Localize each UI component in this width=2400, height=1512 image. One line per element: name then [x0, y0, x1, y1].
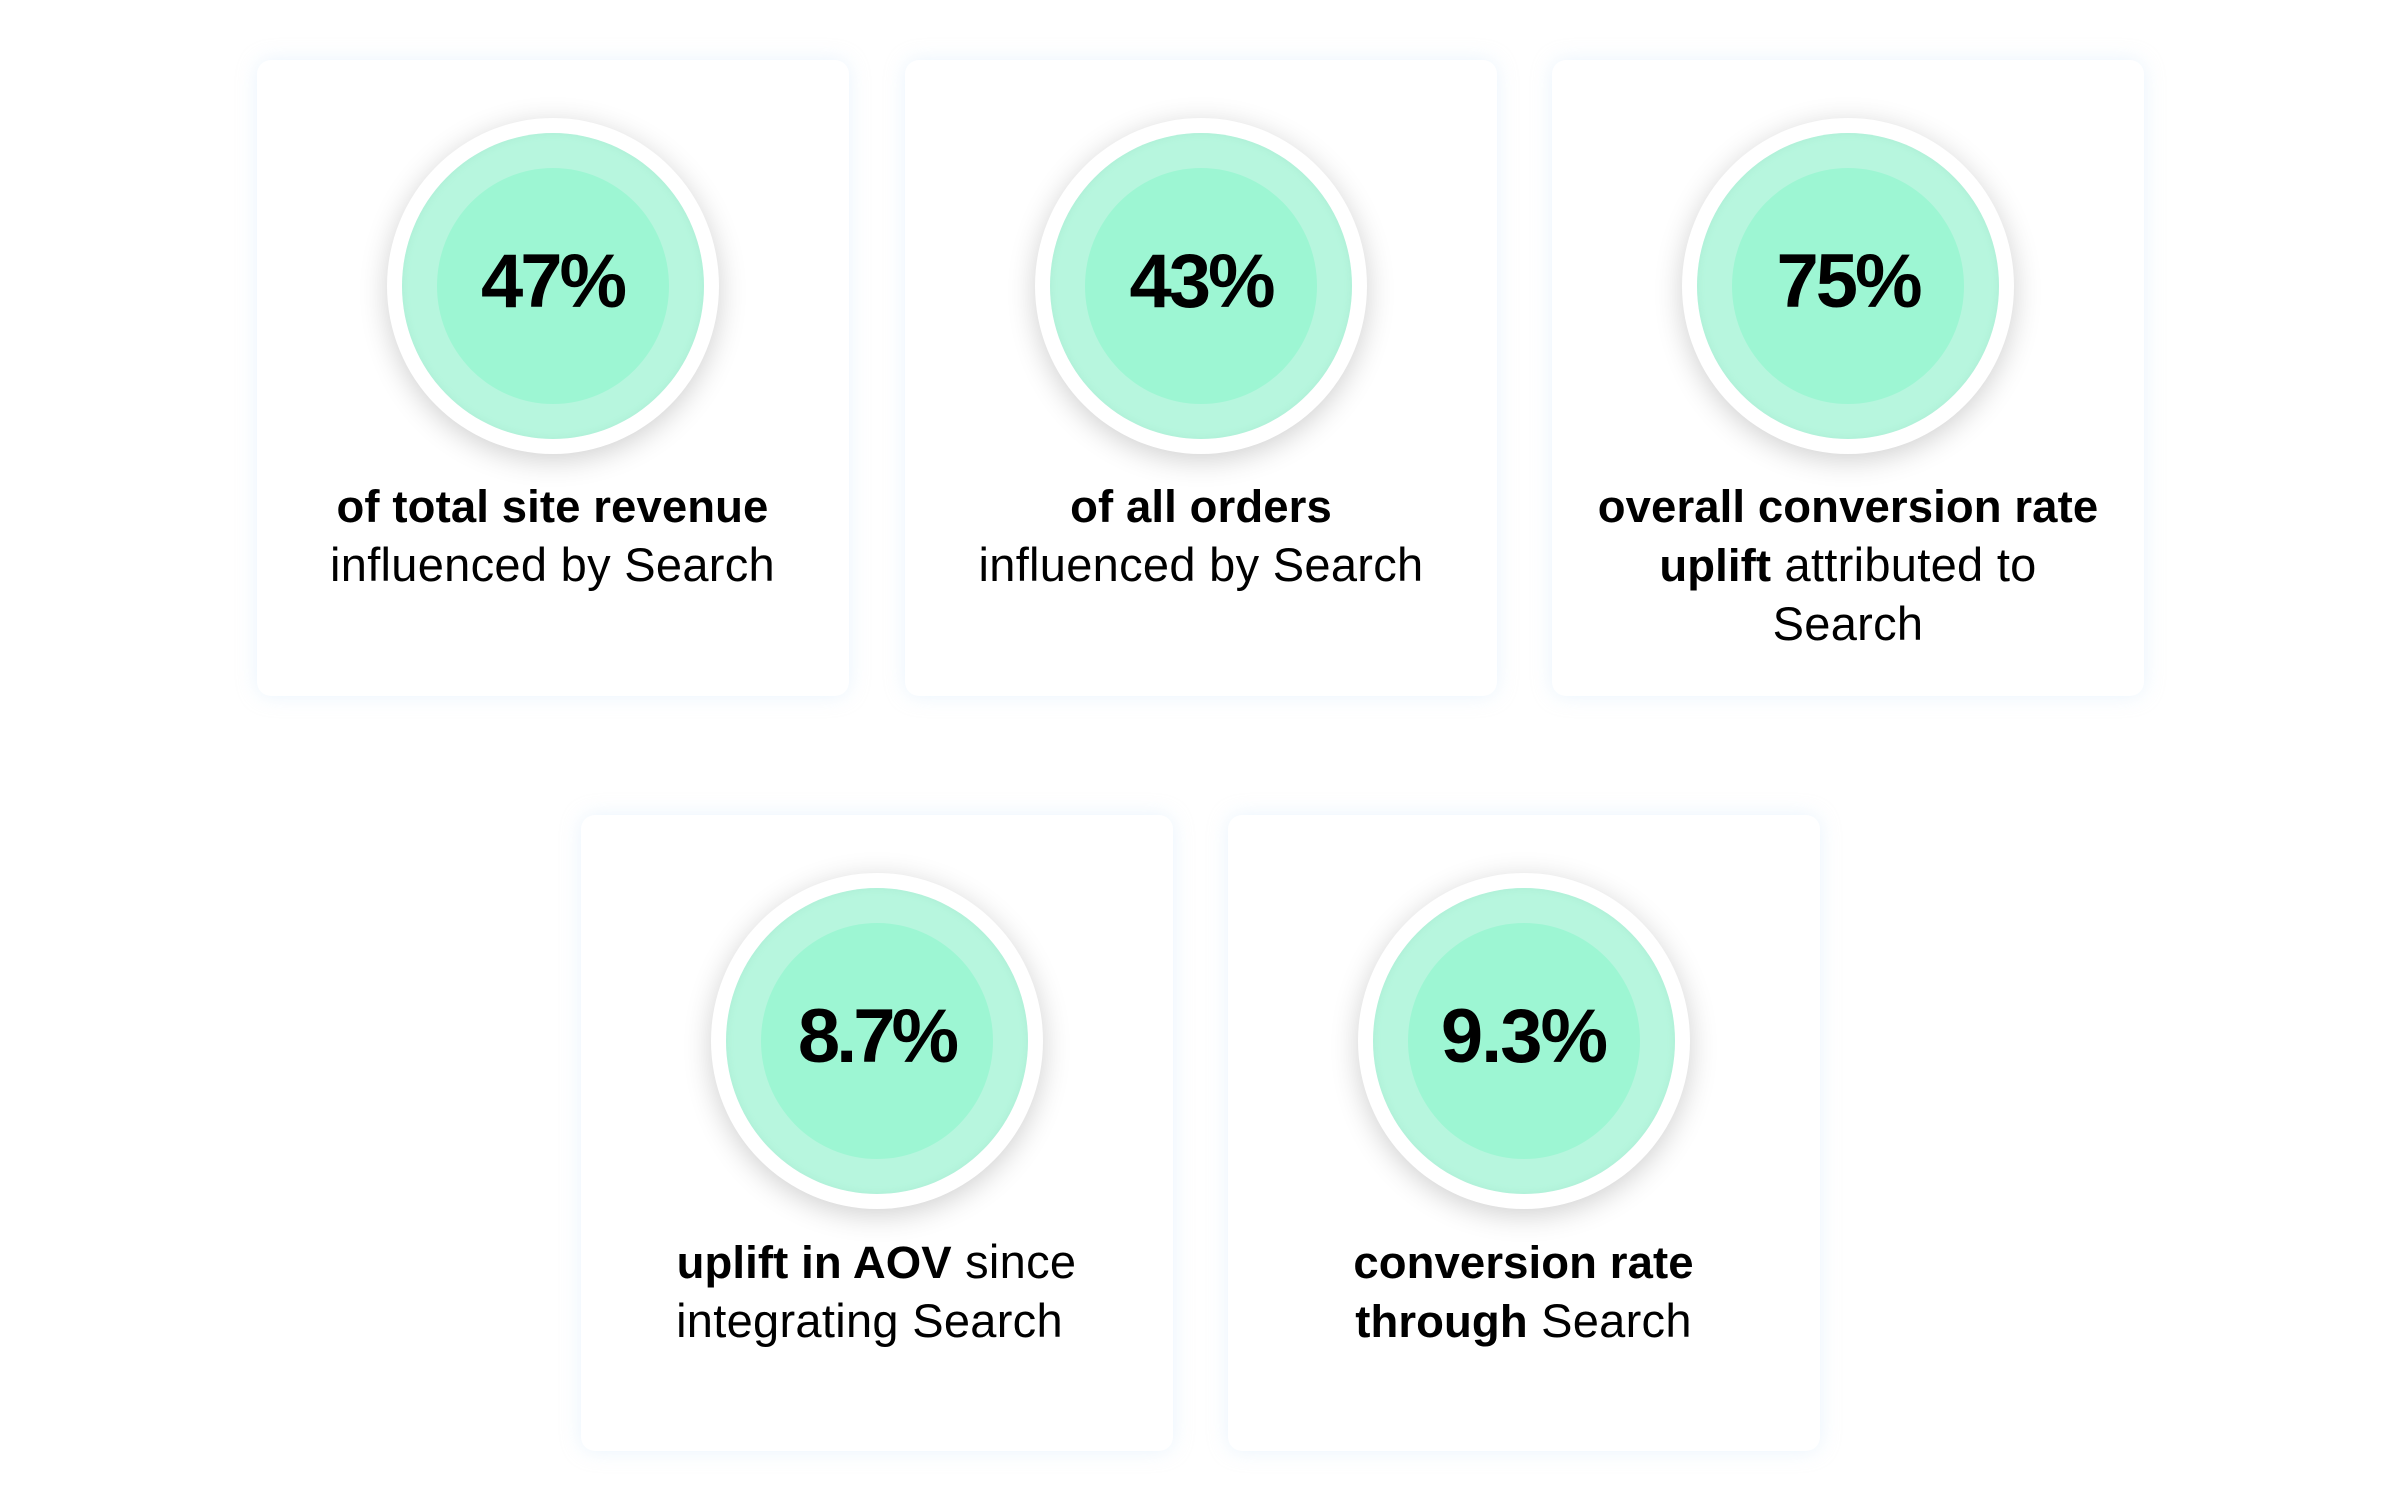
text: conversion uplift label: Search [1773, 596, 1923, 650]
text: orders label: of all orders [1070, 480, 1332, 532]
text: conversion label [1353, 1236, 1694, 1346]
text: revenue label: influenced by Search [330, 538, 775, 590]
text: revenue label [330, 480, 775, 591]
text: conversion uplift label: overall conversion rate [1598, 480, 2098, 532]
icon: 9.3% circle [1358, 872, 1690, 1208]
icon: 47% circle: 47% [481, 238, 624, 324]
text: AOV label: uplift in AOV since [677, 1234, 1076, 1288]
icon: 43% circle [1035, 118, 1367, 454]
panel: AOV uplift [580, 815, 1172, 1451]
icon: 8.7% circle [710, 872, 1042, 1208]
icon: 75% circle [1682, 118, 2014, 454]
panel: conversion rate through search [1228, 815, 1820, 1451]
text: orders label: influenced by Search [979, 538, 1423, 590]
text: conversion uplift label [1598, 480, 2098, 650]
icon: 47% circle [386, 118, 718, 454]
text: revenue label: of total site revenue [337, 480, 768, 532]
text: conversion label: through Search [1355, 1294, 1692, 1346]
text: orders label [979, 480, 1423, 591]
text: AOV label: integrating Search [676, 1294, 1063, 1346]
text: AOV label [676, 1234, 1076, 1347]
icon: 8.7% circle: 8.7% [798, 994, 955, 1078]
icon: 43% circle: 43% [1129, 238, 1273, 324]
panel: conversion rate uplift [1552, 60, 2144, 696]
panel: all orders [905, 60, 1497, 696]
text: conversion uplift label: uplift attributed to [1659, 538, 2037, 590]
icon: 75% circle: 75% [1776, 238, 1920, 324]
text: conversion label: conversion rate [1353, 1236, 1694, 1288]
panel: total site revenue [256, 60, 848, 696]
icon: 9.3% circle: 9.3% [1441, 994, 1606, 1078]
